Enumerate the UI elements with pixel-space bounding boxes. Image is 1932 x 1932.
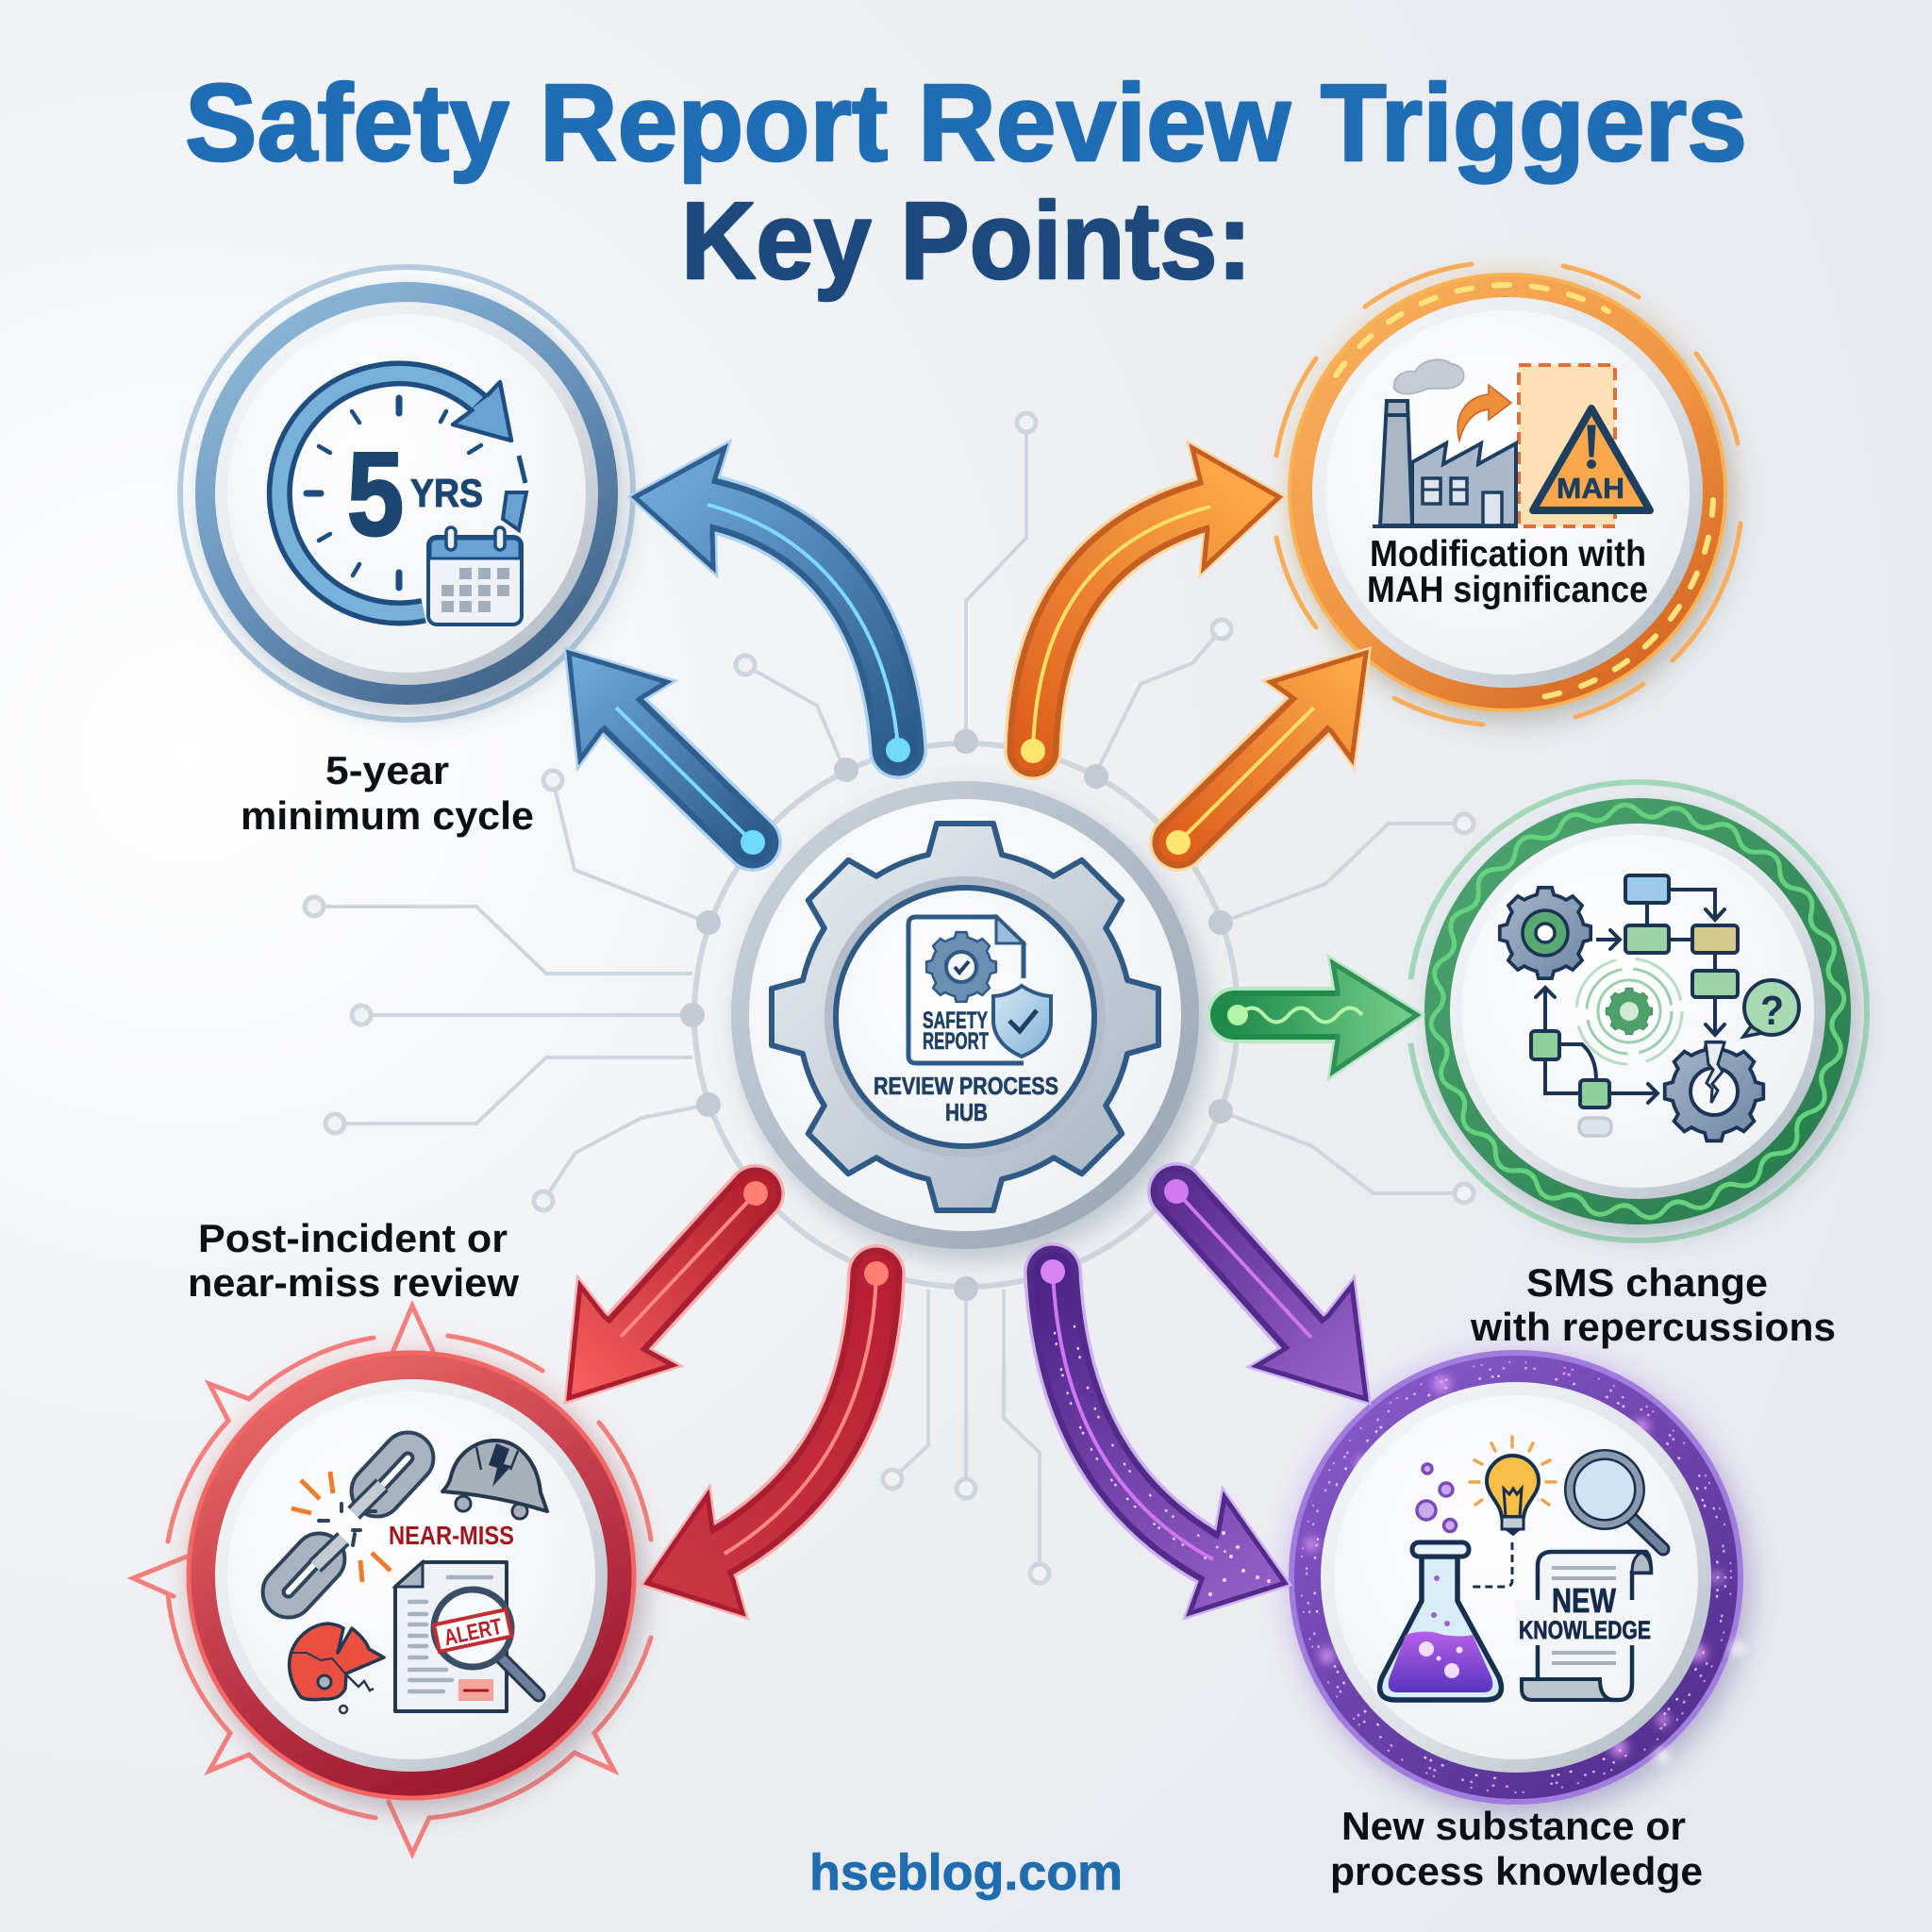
icon: factory [1373,359,1615,526]
hub label [874,1072,1058,1126]
icon: process flowchart with gears [1500,875,1799,1141]
icon: safety report document: SAFETY [923,1008,988,1034]
title: Key Points: [681,179,1252,302]
label: SMS change: with repercussions [1470,1305,1836,1349]
icon: process flowchart with gears: ? [1760,988,1784,1034]
label: new substance: process knowledge [1330,1849,1703,1893]
label: post-incident review [188,1216,519,1305]
arrow: orange upper [1021,448,1279,763]
label: new substance: New substance or [1341,1804,1686,1848]
hub label: HUB [945,1098,988,1126]
label: modification: Modification with [1370,534,1646,575]
panel: post-incident review [133,1306,651,1854]
title: Safety Report Review Triggers [185,61,1747,184]
sparkles [1301,1362,1731,1792]
icon: new knowledge scroll: KNOWLEDGE [1519,1616,1651,1644]
icon: broken chain [267,1437,429,1613]
label: post-incident review: near-miss review [188,1260,519,1305]
title [185,61,1747,302]
label: 5-year minimum cycle [241,748,534,838]
icon: new knowledge scroll: NEW [1552,1581,1616,1620]
icon: clock with return arrow: 5 [347,429,404,560]
arrow: blue lower [569,653,765,855]
hub label: REVIEW PROCESS [874,1072,1058,1100]
icon: report with alert magnifier: ALERT [441,1614,505,1651]
arrow: purple lower [1041,1259,1285,1613]
spiked outer ring [133,1306,651,1854]
arrow: orange lower [1166,653,1366,855]
near-miss label: NEAR-MISS [389,1521,514,1550]
icon: MAH warning triangle [1533,408,1650,510]
label: new substance [1330,1804,1703,1893]
icon: light bulb [1470,1437,1556,1587]
icon: MAH warning triangle: MAH [1557,472,1624,505]
label: SMS change: SMS change [1526,1260,1768,1305]
arrow: purple upper [1164,1179,1366,1399]
icon: magnifier [1570,1455,1663,1549]
wave ring [1431,805,1844,1218]
outer arcs [1276,264,1740,724]
label: modification: MAH significance [1367,570,1648,610]
arrow: blue upper [635,448,910,762]
icon: safety report document [908,917,1051,1063]
icon: clock with return arrow [279,374,526,625]
label: SMS change [1470,1260,1836,1349]
label: post-incident review: Post-incident or [198,1216,508,1260]
icon: report with alert magnifier [395,1562,539,1711]
icon: clock with return arrow: YRS [410,471,483,515]
icon: flask [1380,1464,1501,1700]
icon: calendar [428,527,522,625]
hub gear [772,824,1158,1210]
panel: 5-year cycle [133,264,1867,1901]
dashed energy track [1336,285,1713,699]
arrow: red upper [569,1181,768,1398]
panel: SMS change [1410,782,1867,1241]
panel: modification with MAH significance [1276,264,1740,724]
label: 5-year minimum cycle: 5-year [325,748,449,792]
icon: safety report document: REPORT [923,1028,989,1055]
arrow: red lower [647,1261,889,1613]
central hub [731,781,1199,1249]
icon: new knowledge scroll [1515,1552,1657,1700]
arrow: green [1227,963,1417,1072]
icon: cracked red helmet [290,1624,384,1713]
label: modification [1367,534,1648,610]
label: 5-year minimum cycle: minimum cycle [241,793,534,838]
icon: cracked grey helmet [442,1441,547,1519]
panel: new knowledge [1284,1345,1748,1809]
footer: site name: hseblog.com [809,1844,1123,1901]
circuit network [305,413,1474,1583]
